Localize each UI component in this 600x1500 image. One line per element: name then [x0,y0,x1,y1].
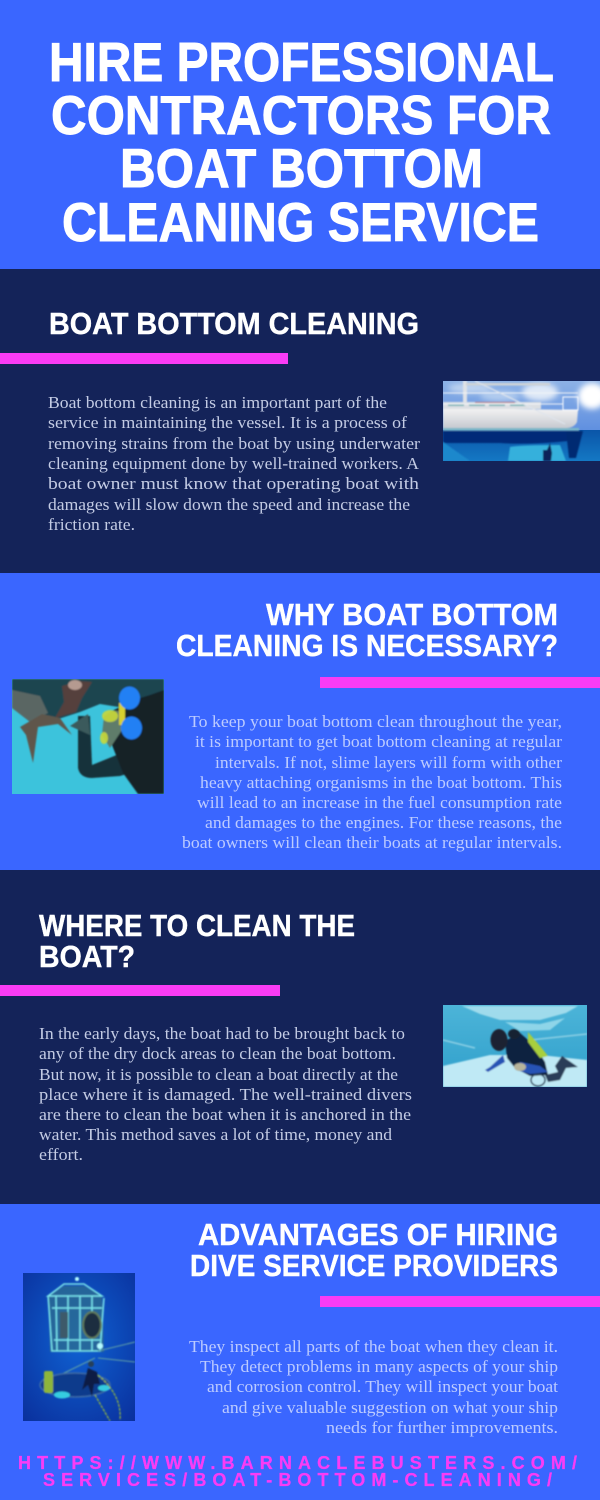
url footer [18,1453,577,1490]
text block: boat bottom cleaning: boat owner must know that operating boat with [48,474,420,493]
title: BOAT BOTTOM [120,137,483,199]
text block: where to clean: In the early days, the boat had to be brought back to [39,1024,405,1043]
text block: advantages: They inspect all parts of the boat when they clean it. [189,1337,558,1356]
heading: advantages: ADVANTAGES OF HIRING [198,1218,558,1252]
title: CONTRACTORS FOR [51,84,551,146]
panel: why boat bottom cleaning is necessary [12,604,600,852]
text block: where to clean: effort. [39,1145,83,1164]
accent bar [320,1296,600,1307]
text block: boat bottom cleaning: damages will slow down the speed and increase the [48,495,410,514]
text block: why necessary [182,712,562,852]
text block: boat bottom cleaning: service in maintaining the vessel. It is a process of [48,413,407,432]
heading: why necessary: CLEANING IS NECESSARY? [176,629,558,663]
text block: advantages [189,1337,558,1437]
url footer: HTTPS://WWW.BARNACLEBUSTERS.COM/ [18,1453,577,1473]
text block: why necessary: it is important to get boat bottom cleaning at regular [195,732,562,751]
panel: title header [0,0,600,269]
title: CLEANING SERVICE [62,191,539,253]
image: diving cage underwater [23,1273,135,1421]
text block: advantages: and corrosion control. They will inspect your boat [207,1377,558,1396]
panel: where to clean the boat [0,870,600,1204]
heading: where to clean: WHERE TO CLEAN THE [39,909,355,943]
text block: why necessary: will lead to an increase in the fuel consumption rate [197,793,562,812]
heading: where to clean: BOAT? [39,940,135,974]
text block: where to clean: are there to clean the boat when it is anchored in the [39,1105,411,1124]
text block: boat bottom cleaning: cleaning equipment done by well-trained workers. A [48,454,420,473]
text block: where to clean: place where it is damaged. The well-trained divers [39,1085,412,1104]
text block: why necessary: heavy attaching organisms in the boat bottom. This [200,773,562,792]
heading: why necessary: WHY BOAT BOTTOM [266,598,558,632]
panel: boat bottom cleaning [0,269,600,573]
accent bar [0,353,288,364]
url footer: SERVICES/BOAT-BOTTOM-CLEANING/ [43,1470,552,1490]
text block: why necessary: intervals. If not, slime layers will form with other [215,753,562,772]
text block: why necessary: boat owners will clean their boats at regular intervals. [182,833,562,852]
text block: boat bottom cleaning: removing strains from the boat by using underwater [48,434,420,453]
text block: why necessary: and damages to the engines. For these reasons, the [205,813,562,832]
text block: advantages: They detect problems in many aspects of your ship [200,1357,558,1376]
text block: why necessary: To keep your boat bottom clean throughout the year, [189,712,562,731]
accent bar [0,985,280,996]
text block: boat bottom cleaning: friction rate. [48,515,135,534]
image: scuba diver in pool [443,1005,587,1087]
text block: where to clean: any of the dry dock areas to clean the boat bottom. [39,1044,396,1063]
text block: advantages: and give valuable suggestion on what your ship [222,1398,558,1417]
heading: why necessary [176,598,558,663]
text block: advantages: needs for further improvements. [326,1418,558,1437]
image: sailboat hull with diver [443,381,600,461]
text block: where to clean [39,1024,412,1164]
image: diver cleaning hull [12,679,164,794]
text block: boat bottom cleaning: Boat bottom cleaning is an important part of the [48,393,387,412]
heading: boat bottom cleaning: BOAT BOTTOM CLEANING [49,307,419,341]
heading: where to clean [39,909,355,974]
text block: where to clean: water. This method saves a lot of time, money and [39,1125,393,1144]
text block: where to clean: But now, it is possible to clean a boat directly at the [39,1065,398,1084]
heading: advantages: DIVE SERVICE PROVIDERS [190,1249,558,1283]
heading: advantages [190,1218,558,1283]
accent bar [320,677,600,688]
title [49,31,554,253]
text block: boat bottom cleaning [48,393,420,534]
panel: advantages of hiring dive service providers [19,1224,600,1486]
